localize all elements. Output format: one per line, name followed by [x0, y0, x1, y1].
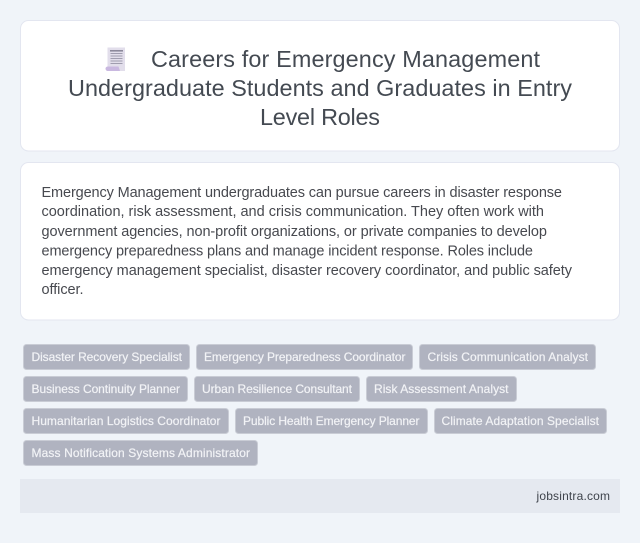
tag: Climate Adaptation Specialist: Climate Adaptation Specialist — [442, 414, 600, 428]
tag: Mass Notification Systems Administrator — [24, 440, 258, 466]
tag: Mass Notification Systems Administrator: Mass Notification Systems Administrator — [32, 446, 250, 460]
tag: Risk Assessment Analyst — [366, 376, 516, 402]
footer — [20, 479, 620, 513]
text block: description: emergency preparedness plans and manage incident response. Roles include — [42, 244, 533, 260]
footer source text: jobsintra.com — [536, 489, 610, 503]
panel: header — [20, 20, 620, 151]
tag: Emergency Preparedness Coordinator — [196, 344, 412, 370]
text block: description: coordination, risk assessment, and crisis communication. They often work with — [42, 204, 544, 220]
tag: Humanitarian Logistics Coordinator — [24, 408, 228, 434]
title: Level Roles — [260, 104, 380, 130]
tag: Crisis Communication Analyst: Crisis Communication Analyst — [428, 350, 589, 364]
text block: description: Emergency Management undergraduates can pursue careers in disaster response — [42, 185, 562, 201]
tag: Business Continuity Planner — [24, 376, 188, 402]
tag: Public Health Emergency Planner — [236, 408, 428, 434]
tag: Public Health Emergency Planner: Public Health Emergency Planner — [243, 414, 420, 428]
tag: Disaster Recovery Specialist — [24, 344, 190, 370]
tag: Urban Resilience Consultant: Urban Resilience Consultant — [202, 382, 353, 396]
tag: Disaster Recovery Specialist: Disaster Recovery Specialist — [32, 350, 183, 364]
text block: description: emergency management specialist, disaster recovery coordinator, and public safety — [42, 263, 573, 279]
text block: description: government agencies, non-profit organizations, or private companies to develop — [42, 224, 547, 240]
tag: Emergency Preparedness Coordinator: Emergency Preparedness Coordinator — [204, 350, 406, 364]
tag: Business Continuity Planner: Business Continuity Planner — [32, 382, 180, 396]
text block: description: officer. — [42, 282, 84, 298]
tag list — [24, 344, 606, 466]
tag: Crisis Communication Analyst — [420, 344, 596, 370]
icon: scroll document — [106, 48, 125, 71]
panel: description — [20, 162, 620, 320]
tag: Humanitarian Logistics Coordinator: Humanitarian Logistics Coordinator — [32, 414, 220, 428]
tag: Risk Assessment Analyst: Risk Assessment Analyst — [374, 382, 509, 396]
text block: description — [42, 185, 573, 298]
tag: Urban Resilience Consultant — [194, 376, 360, 402]
title: Undergraduate Students and Graduates in Entry — [68, 75, 572, 101]
title — [68, 46, 572, 130]
tag: Climate Adaptation Specialist — [434, 408, 606, 434]
title: Careers for Emergency Management — [151, 46, 540, 72]
